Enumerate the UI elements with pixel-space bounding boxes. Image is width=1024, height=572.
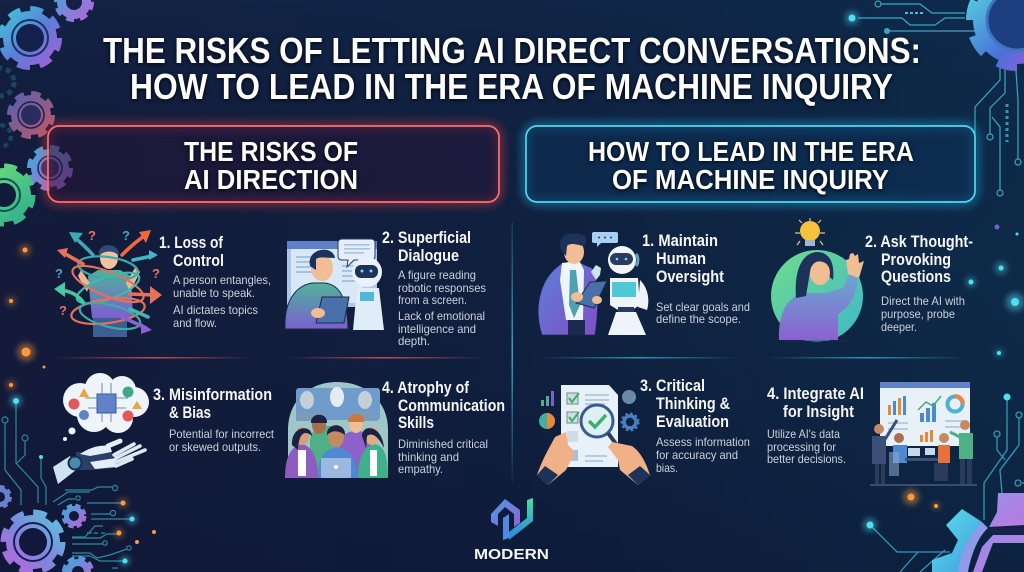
dividers	[53, 222, 968, 484]
text block: 4. Atrophy of Communication Skills: thinking and	[398, 450, 459, 464]
text block: 1. Maintain Human Oversight	[642, 232, 750, 326]
glowing particle dots	[6, 224, 1024, 566]
icon: team presenting a data dashboard	[870, 382, 977, 485]
text block: 2. Superficial Dialogue: Lack of emotional	[398, 309, 485, 323]
logo: MODERN	[474, 498, 549, 563]
text block: 2. Superficial Dialogue: intelligence and	[398, 322, 476, 336]
text block: 1. Maintain Human Oversight: Set clear goals and	[656, 300, 750, 314]
icon: person reading a screen beside a robot	[285, 239, 384, 330]
decorative circuits and gear: upper right	[845, 0, 1024, 196]
text block: 2. Superficial Dialogue: A figure reading	[398, 268, 476, 282]
text block: 1. Maintain Human Oversight: Human	[656, 250, 706, 268]
text block: 2. Superficial Dialogue: 2. Superficial	[382, 229, 471, 247]
main title: HOW TO LEAD IN THE ERA OF MACHINE INQUIRY	[130, 66, 893, 107]
text block: 4. Atrophy of Communication Skills: Diminished critical	[398, 437, 488, 451]
text block: 1. Loss of Control	[159, 234, 271, 330]
text block: 4. Atrophy of Communication Skills: Communication	[398, 397, 505, 415]
text block: 2. Superficial Dialogue: Dialogue	[398, 247, 459, 265]
text block: 3. Critical Thinking and Evaluation: bias.	[656, 461, 678, 475]
text block: 2. Ask Thought-Provoking Questions: Direct the AI with	[881, 294, 965, 308]
text block: 3. Critical Thinking and Evaluation	[640, 377, 750, 475]
logo: MODERN: MODERN	[474, 547, 549, 563]
text block: 2. Ask Thought-Provoking Questions: 2. Ask Thought-	[865, 233, 973, 251]
text block: 2. Ask Thought-Provoking Questions: deeper.	[881, 320, 917, 334]
text block: 1. Maintain Human Oversight: Oversight	[656, 268, 724, 286]
text block: 4. Integrate AI for Insight: better decisions.	[767, 452, 846, 466]
panel heading: how to lead in the era of machine inquiry: HOW TO LEAD IN THE ERA	[588, 136, 914, 167]
text block: 3. Critical Thinking and Evaluation: Evaluation	[656, 413, 729, 431]
text block: 3. Critical Thinking and Evaluation: Thinking &	[656, 395, 730, 413]
text block: 4. Integrate AI for Insight: Utilize AI's data	[767, 427, 840, 441]
icon: group of people with a laptop	[285, 382, 388, 478]
text block: 2. Ask Thought-Provoking Questions: Questions	[881, 268, 951, 286]
text block: 4. Atrophy of Communication Skills: empathy.	[398, 462, 443, 476]
text block: 4. Atrophy of Communication Skills: Skills	[398, 414, 434, 432]
panel heading: the risks of AI direction: AI DIRECTION	[184, 164, 358, 195]
icon: person tangled in arrows and loops: ?	[55, 266, 63, 281]
text block: 3. Misinformation and Bias: & Bias	[169, 404, 211, 422]
text block: 4. Atrophy of Communication Skills: 4. Atrophy of	[382, 379, 469, 397]
text block: 2. Ask Thought-Provoking Questions: Provoking	[881, 251, 951, 269]
text block: 3. Critical Thinking and Evaluation: Assess information	[656, 435, 750, 449]
panel heading: how to lead in the era of machine inquiry: OF MACHINE INQUIRY	[612, 164, 889, 195]
text block: 1. Maintain Human Oversight: 1. Maintain	[642, 232, 718, 250]
icon: person tangled in arrows and loops: ?	[59, 303, 67, 318]
text block: 3. Misinformation and Bias: 3. Misinformation	[153, 386, 272, 404]
main title	[103, 30, 921, 107]
icon: person tangled in arrows and loops: ?	[88, 228, 96, 243]
icon: hands with magnifying glass over a checklist	[537, 385, 650, 485]
text block: 4. Integrate AI for Insight: 4. Integrate AI	[767, 385, 864, 403]
text block: 2. Ask Thought-Provoking Questions: purpose, probe	[881, 307, 955, 321]
decorative gear and circuits: lower right	[863, 394, 1024, 572]
text block: 3. Critical Thinking and Evaluation: 3. Critical	[640, 377, 705, 395]
panel heading: the risks of AI direction	[48, 126, 499, 202]
text block: 3. Misinformation and Bias: or skewed outputs.	[169, 440, 261, 454]
text block: 4. Integrate AI for Insight: processing for	[767, 440, 836, 454]
text block: 4. Atrophy of Communication Skills	[382, 379, 505, 476]
text block: 1. Loss of Control: AI dictates topics	[173, 303, 258, 317]
panel heading: the risks of AI direction: THE RISKS OF	[184, 136, 358, 167]
decorative gears and circuits: lower left	[0, 401, 131, 572]
text block: 1. Loss of Control: and flow.	[173, 316, 217, 330]
text block: 2. Ask Thought-Provoking Questions	[865, 233, 973, 334]
text block: 3. Critical Thinking and Evaluation: for accuracy and	[656, 448, 738, 462]
icon: person tangled in arrows and loops: ?	[152, 266, 160, 281]
text block: 1. Loss of Control: A person entangles,	[173, 273, 271, 287]
text block: 3. Misinformation and Bias	[153, 386, 275, 454]
icon: businessman with tablet and robot	[538, 232, 648, 335]
icon: woman raising hand with light bulb	[771, 218, 864, 342]
text block: 2. Superficial Dialogue	[382, 229, 486, 348]
text block: 1. Loss of Control: unable to speak.	[173, 286, 255, 300]
text block: 2. Superficial Dialogue: depth.	[398, 334, 430, 348]
text block: 2. Superficial Dialogue: from a screen.	[398, 293, 467, 307]
text block: 4. Integrate AI for Insight: for Insight	[783, 403, 854, 421]
text block: 2. Superficial Dialogue: robotic responses	[398, 281, 486, 295]
text block: 3. Misinformation and Bias: Potential for incorrect	[169, 427, 275, 441]
main title: THE RISKS OF LETTING AI DIRECT CONVERSATIONS:	[103, 30, 921, 71]
text block: 4. Integrate AI for Insight	[767, 385, 864, 466]
icon: thought cloud above a robotic hand	[53, 373, 149, 484]
text block: 1. Loss of Control: 1. Loss of	[159, 234, 223, 252]
icon: person tangled in arrows and loops	[54, 228, 162, 337]
text block: 1. Maintain Human Oversight: define the scope.	[656, 312, 741, 326]
text block: 1. Loss of Control: Control	[173, 252, 224, 270]
icon: person tangled in arrows and loops: ?	[122, 228, 130, 243]
decorative gears: upper left	[0, 0, 91, 222]
panel heading: how to lead in the era of machine inquiry	[526, 126, 975, 202]
